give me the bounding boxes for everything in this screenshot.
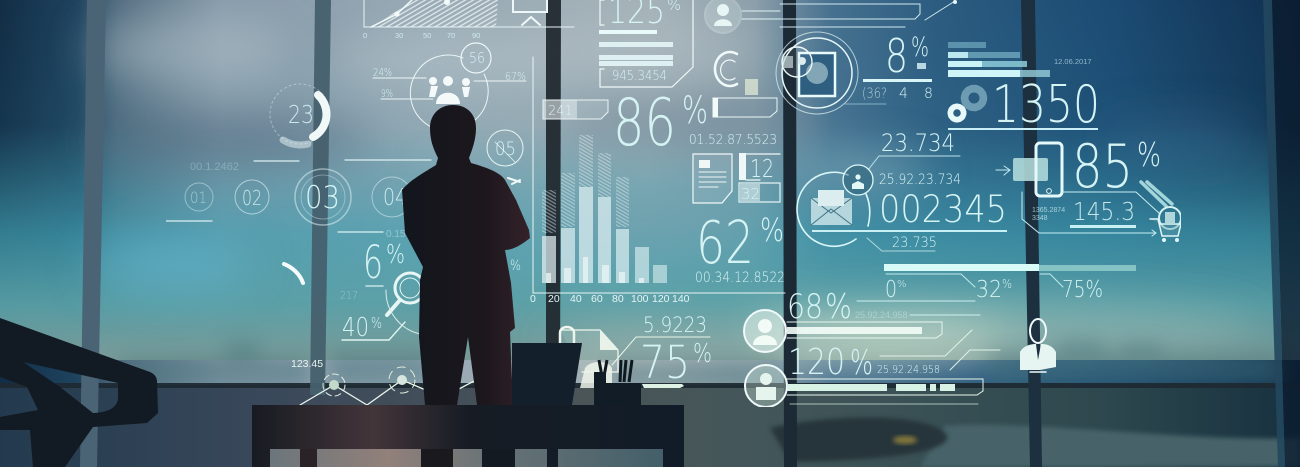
progress bar: 0% 32% 75% xyxy=(884,264,1136,303)
stat: 5.9223 and 75% xyxy=(612,313,712,389)
stat: 6% xyxy=(340,236,405,302)
badge: 05: 05 xyxy=(495,138,516,160)
chart: top area chart: 50 xyxy=(423,31,431,40)
chart: top area chart xyxy=(363,0,574,40)
bar chart: 140 xyxy=(672,293,690,305)
icon: phone with arrow xyxy=(996,143,1062,196)
bar chart: 80 xyxy=(612,293,624,305)
stat: 23 donut xyxy=(270,84,330,145)
people group circle with 56 xyxy=(373,43,526,131)
icon: businessman xyxy=(1020,319,1056,372)
stat: 8%: % xyxy=(911,32,929,63)
stat: 5.9223 and 75%: 75 xyxy=(640,336,690,389)
stat: 002345: 002345 xyxy=(879,188,1007,231)
progress bar: 0% 32% 75%: % xyxy=(897,279,907,290)
bar chart: 0 xyxy=(530,293,536,305)
icon: document 12 32 xyxy=(693,153,780,203)
stat: 23.734 block: 23.734 xyxy=(881,129,955,157)
stat: 40% xyxy=(342,313,405,343)
line chart at desk xyxy=(291,358,476,405)
stat: 86% with 241 tag: 86 xyxy=(613,86,676,161)
stat: gears 1350: 1350 xyxy=(992,75,1100,135)
line chart at desk: 123.45 xyxy=(291,358,323,370)
chart: top area chart: 70 xyxy=(447,31,455,40)
bar chart: 20 xyxy=(548,293,560,305)
timeline circles 01 02 03 04: 0.15 xyxy=(386,229,406,240)
stat: 86% with 241 tag: 241 xyxy=(548,104,573,119)
people group circle with 56: 9% xyxy=(381,87,393,100)
river and island xyxy=(770,418,1300,467)
stat: 23.734 block xyxy=(868,129,961,188)
icon: envelope circle xyxy=(797,165,873,246)
stat: 6%: 217 xyxy=(340,289,358,302)
bar group: horizontal bars xyxy=(948,42,1092,77)
timeline circles 01 02 03 04: 02 xyxy=(242,186,262,210)
stat: 8%: 4 xyxy=(899,86,908,102)
stat: 5.9223 and 75%: % xyxy=(693,339,712,369)
stat: 68% with user bar: 25.92.24.958 xyxy=(855,310,908,320)
stat: 8%: 8 xyxy=(924,86,933,102)
stat: 86% with 241 tag xyxy=(533,57,785,293)
city skyline haze xyxy=(120,340,1290,386)
progress bar: 0% 32% 75%: 0 xyxy=(885,277,897,303)
progress bar: 0% 32% 75%: 32 xyxy=(976,277,1002,303)
stat: 23.734 block: 25.92.23.734 xyxy=(879,172,961,188)
pen holder xyxy=(594,360,641,406)
icon: tablet in rings xyxy=(776,32,858,114)
badge: 05 xyxy=(487,130,523,184)
stat: 6%: 6 xyxy=(363,236,383,289)
icon: document 12 32: 12 xyxy=(750,154,774,183)
icon: shopping cart xyxy=(1150,207,1181,242)
bar chart: 40 xyxy=(570,293,582,305)
stat: 8% xyxy=(845,29,933,104)
hologram graphics xyxy=(166,0,1181,407)
stat: 23 donut: 23 xyxy=(288,100,314,129)
stat: 145.3: 1365.2874 xyxy=(1032,207,1065,214)
chart: top area chart: 0 xyxy=(363,31,367,40)
stat: 8%: (36? xyxy=(862,86,887,102)
stat: 145.3: 3348 xyxy=(1032,215,1048,222)
figure: man silhouette xyxy=(402,105,530,405)
stat: 120% with user bar xyxy=(745,342,983,407)
stat: 5.9223 and 75%: 5.9223 xyxy=(643,313,707,337)
stat: 6%: % xyxy=(386,240,405,270)
stat: 002345 xyxy=(812,188,1007,251)
stat: 62%: 00.34.12.8522 xyxy=(695,270,785,286)
stat: 120% with user bar: 120 xyxy=(788,342,845,383)
stat: 145.3 xyxy=(1022,192,1156,236)
icon: paperclip document xyxy=(560,327,618,388)
data card: 125% xyxy=(599,0,693,87)
chair silhouette xyxy=(0,318,158,467)
percent beside figure: % xyxy=(510,258,521,274)
stat: 68% with user bar xyxy=(744,287,1000,370)
timeline circles 01 02 03 04: 00.1.2462 xyxy=(190,161,239,173)
bar chart: 120 xyxy=(652,293,670,305)
stat: 85%: % xyxy=(1137,135,1161,174)
desk xyxy=(252,405,684,467)
bar chart: 60 xyxy=(591,293,603,305)
stat: 85% xyxy=(1062,132,1172,214)
stat: 62%: 62 xyxy=(696,208,754,277)
icon: document 12 32: 32 xyxy=(741,185,760,203)
stat: 145.3: 145.3 xyxy=(1073,197,1135,226)
stat: gears 1350 xyxy=(948,75,1100,135)
stat: 86% with 241 tag: % xyxy=(682,89,708,132)
progress bar: 0% 32% 75%: % xyxy=(1002,277,1012,291)
people group circle with 56: 56 xyxy=(469,49,485,67)
stat: 86% with 241 tag: 01.52.87.5523 xyxy=(689,132,777,148)
laptop xyxy=(512,343,582,405)
timeline circles 01 02 03 04: 03 xyxy=(305,180,340,216)
stat: 8%: 8 xyxy=(885,29,908,83)
timeline circles 01 02 03 04: 04 xyxy=(383,185,407,211)
stat: 68% with user bar: % xyxy=(825,287,852,327)
data card: 125%: 945.3454 xyxy=(612,69,667,84)
stat: 40%: 40 xyxy=(342,313,369,343)
stat: 002345: 23.735 xyxy=(892,235,937,251)
people group circle with 56: 24% xyxy=(373,66,392,79)
icon: C ring xyxy=(715,52,758,95)
bar chart: 100 xyxy=(631,293,649,305)
timeline circles 01 02 03 04 xyxy=(166,160,431,240)
icon: top user circle xyxy=(705,0,957,33)
progress bar: 0% 32% 75%: 75% xyxy=(1062,277,1103,303)
stat: 62%: % xyxy=(760,211,784,249)
icon: magnifier xyxy=(386,273,425,334)
bar chart xyxy=(530,135,690,305)
chart: top area chart: 30 xyxy=(395,31,403,40)
stat: 40%: % xyxy=(371,314,382,332)
stat: 120% with user bar: 25.92.24.958 xyxy=(877,364,940,376)
stat: 68% with user bar: 68 xyxy=(787,287,823,327)
people group circle with 56: 67% xyxy=(505,70,526,83)
bar group: horizontal bars: 12.06.2017 xyxy=(1054,57,1092,66)
stat: 120% with user bar: % xyxy=(850,343,873,383)
stat: 85%: 85 xyxy=(1072,132,1133,202)
chart: top area chart: 90 xyxy=(472,31,480,40)
arc accent xyxy=(284,264,303,283)
timeline circles 01 02 03 04: 01 xyxy=(190,188,207,207)
